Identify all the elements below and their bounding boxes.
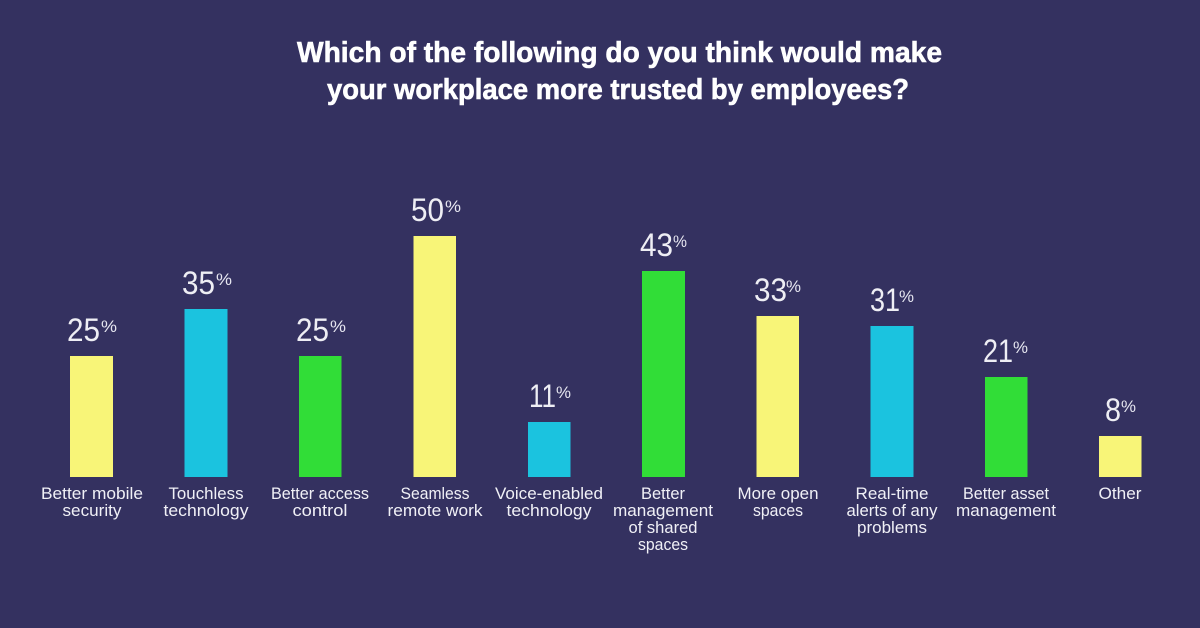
bar: Better management of shared spaces 43%: of shared xyxy=(628,519,698,537)
bar: Better asset management 21%: management xyxy=(956,502,1056,520)
bar: Real-time alerts of any problems 31%: % xyxy=(899,287,914,306)
bar: More open spaces 33%: % xyxy=(786,277,801,296)
bar: Better mobile security 25%: % xyxy=(101,317,117,336)
bar: Better mobile security 25% xyxy=(41,312,143,520)
bar: Other 8% xyxy=(1098,392,1142,503)
bar: Real-time alerts of any problems 31%: Real-time xyxy=(856,485,928,503)
bar: Better asset management 21% xyxy=(956,333,1056,520)
bar: Other 8%: 8 xyxy=(1105,392,1121,428)
bar: Touchless technology 35%: Touchless xyxy=(168,485,244,503)
bar: Better management of shared spaces 43% xyxy=(613,227,713,554)
bar: Seamless remote work 50% xyxy=(388,192,483,520)
bar: Other 8%: % xyxy=(1121,397,1136,416)
bar: Better access control 25%: Better access xyxy=(271,485,369,503)
bar chart xyxy=(41,192,1142,554)
bar: Voice-enabled technology 11%: technology xyxy=(506,502,592,520)
bar: Real-time alerts of any problems 31%: 31 xyxy=(870,282,900,318)
bar: Better management of shared spaces 43%: Better xyxy=(641,485,685,503)
bar: Better management of shared spaces 43%: management xyxy=(613,502,713,520)
bar: Touchless technology 35%: technology xyxy=(164,502,249,520)
bar: Real-time alerts of any problems 31% xyxy=(846,282,938,537)
bar: Better management of shared spaces 43%: spaces xyxy=(638,536,688,554)
bar: Seamless remote work 50%: remote work xyxy=(388,502,483,520)
bar: Better asset management 21%: 21 xyxy=(983,333,1013,369)
bar: Voice-enabled technology 11%: 11 xyxy=(529,378,556,414)
bar: Better access control 25%: 25 xyxy=(296,312,329,348)
bar: Real-time alerts of any problems 31%: problems xyxy=(857,519,927,537)
bar: More open spaces 33%: 33 xyxy=(754,272,787,308)
bar: Better management of shared spaces 43%: % xyxy=(673,232,687,251)
bar: Touchless technology 35% xyxy=(164,265,249,520)
bar: Touchless technology 35%: 35 xyxy=(182,265,215,301)
bar: Voice-enabled technology 11% xyxy=(495,378,603,520)
bar: Seamless remote work 50%: % xyxy=(445,197,461,216)
bar: Better access control 25%: control xyxy=(292,502,348,520)
bar: Better mobile security 25%: 25 xyxy=(67,312,100,348)
bar: Touchless technology 35%: % xyxy=(216,270,232,289)
bar: More open spaces 33%: spaces xyxy=(753,502,803,520)
bar: More open spaces 33%: More open xyxy=(738,485,818,503)
title: Which of the following do you think would make xyxy=(297,37,942,69)
bar: More open spaces 33% xyxy=(738,272,818,520)
bar: Voice-enabled technology 11%: Voice-enabled xyxy=(495,485,603,503)
bar: Better access control 25%: % xyxy=(330,317,346,336)
title xyxy=(297,37,942,106)
bar: Better asset management 21%: % xyxy=(1013,338,1028,357)
bar: Seamless remote work 50%: Seamless xyxy=(400,485,470,503)
bar: Better asset management 21%: Better asset xyxy=(963,485,1049,503)
bar: Other 8%: Other xyxy=(1098,485,1142,503)
bar: Better management of shared spaces 43%: 43 xyxy=(640,227,673,263)
bar: Better mobile security 25%: Better mobile xyxy=(41,485,143,503)
title: your workplace more trusted by employees? xyxy=(327,74,909,106)
bar: Real-time alerts of any problems 31%: alerts of any xyxy=(846,502,938,520)
bar: Better mobile security 25%: security xyxy=(62,502,122,520)
bar: Seamless remote work 50%: 50 xyxy=(411,192,444,228)
bar: Voice-enabled technology 11%: % xyxy=(556,383,571,402)
bar: Better access control 25% xyxy=(271,312,369,520)
